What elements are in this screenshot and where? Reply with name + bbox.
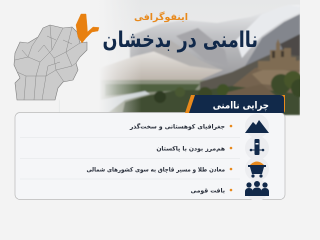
icon: mountain	[245, 120, 269, 133]
panel: causes	[15, 112, 285, 201]
icon: mine cart	[248, 162, 266, 178]
header banner	[185, 95, 285, 113]
icon: border post	[250, 139, 264, 155]
subtitle: اینفوگرافی	[134, 11, 188, 23]
province borders	[15, 25, 80, 100]
landscape photo	[60, 0, 309, 116]
fortress	[258, 39, 300, 70]
row dividers	[20, 138, 240, 179]
header banner: چرایی ناامنی	[213, 100, 269, 112]
icon backgrounds	[245, 114, 269, 201]
title: ناامنی در بدخشان	[103, 27, 258, 53]
infographic canvas	[14, 0, 300, 200]
background	[0, 0, 300, 200]
item: Pakistan border: هم‌مرز بودن با پاکستان	[156, 146, 225, 152]
icon: people	[245, 181, 269, 196]
item: gold mines and smuggling: معادن طلا و مسیر قاچاق به سوی کشورهای شمالی	[87, 166, 225, 174]
map of Afghanistan	[14, 14, 99, 100]
item: mountainous geography: جغرافیای کوهستانی و سخت‌گذر	[129, 122, 225, 130]
item: ethnic fabric: بافت قومی	[191, 188, 225, 194]
Badakhshan province	[76, 14, 99, 43]
